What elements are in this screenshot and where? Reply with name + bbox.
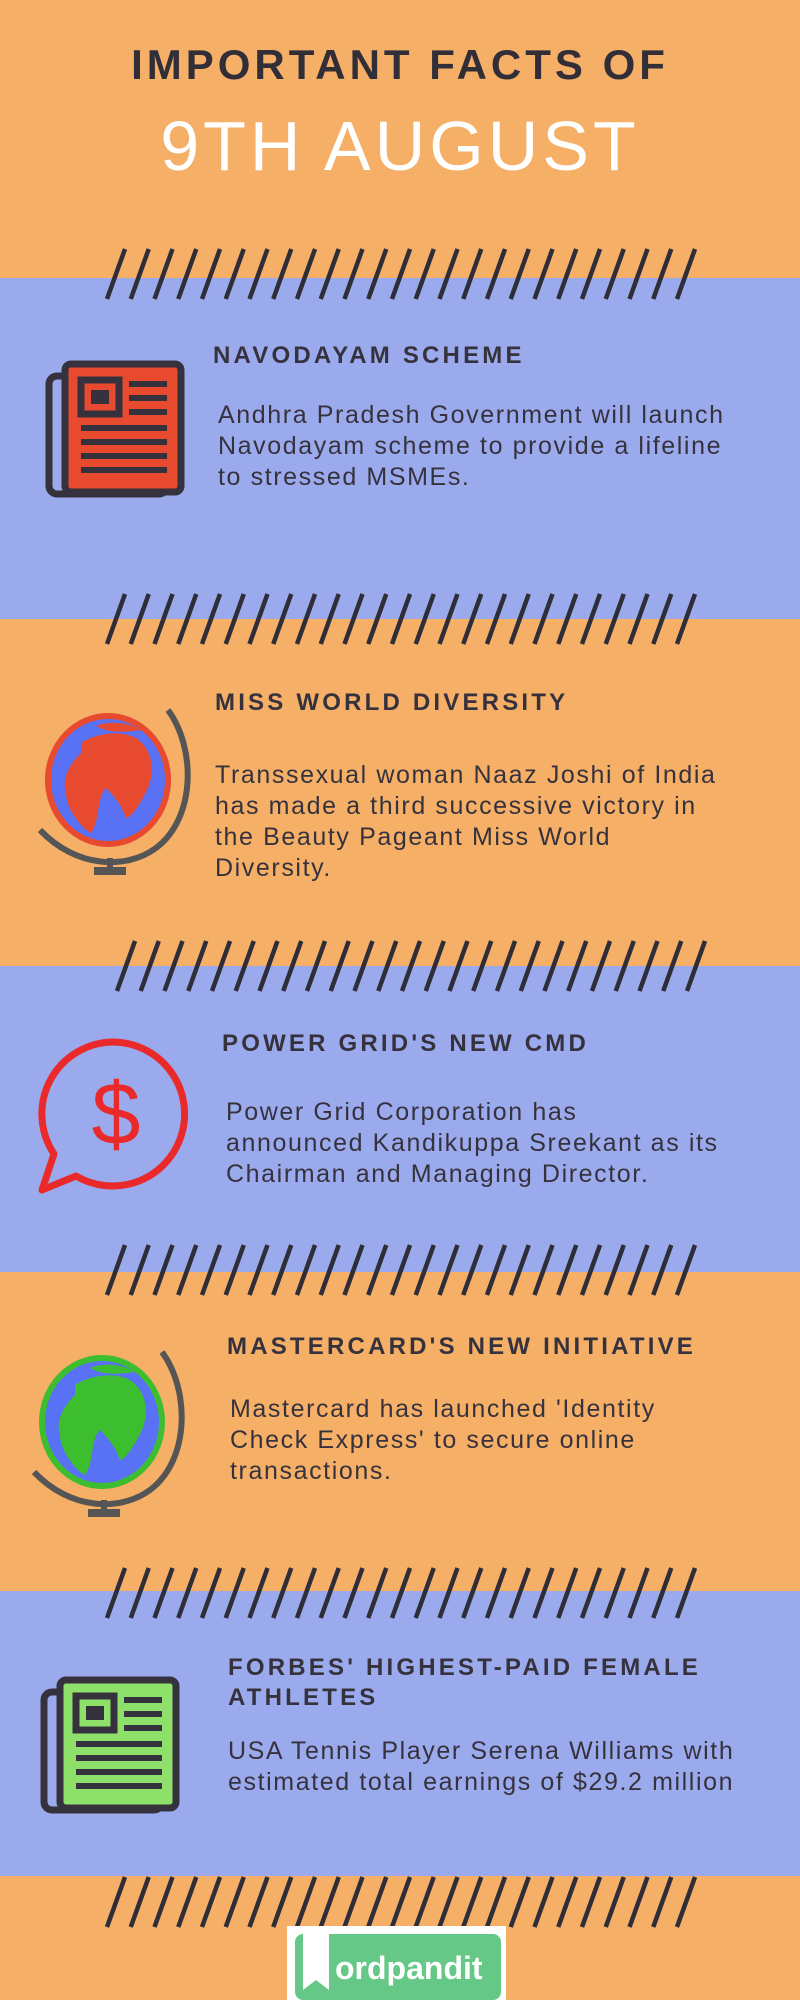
- slashes band 1: [104, 248, 698, 300]
- body text: Power Grid Corporation has: [226, 1098, 577, 1126]
- body text: Chairman and Managing Director.: [226, 1160, 649, 1188]
- icon: newspaper green: [40, 1676, 180, 1814]
- slashes band 6: [104, 1876, 698, 1928]
- body text: has made a third successive victory in: [215, 792, 697, 820]
- heading: MASTERCARD'S NEW INITIATIVE: [227, 1333, 696, 1360]
- heading: NAVODAYAM SCHEME: [213, 342, 525, 369]
- panel: Mastercard new initiative: [32, 1333, 696, 1517]
- logo: wordpandit: [287, 1926, 506, 2000]
- slashes band 3: [114, 940, 708, 992]
- icon: bookmark W: [303, 1934, 329, 1990]
- body text: [218, 401, 725, 491]
- panel: Miss World Diversity: [38, 689, 717, 882]
- icon: newspaper red: [46, 360, 184, 498]
- title line 2: date: 9TH AUGUST: [160, 107, 640, 185]
- panel: Navodayam scheme: [46, 342, 725, 498]
- heading: [228, 1654, 701, 1711]
- body text: Transsexual woman Naaz Joshi of India: [215, 761, 717, 789]
- slashes band 2: [104, 593, 698, 645]
- body text: transactions.: [230, 1457, 393, 1485]
- body text: Check Express' to secure online: [230, 1426, 636, 1454]
- body text: to stressed MSMEs.: [218, 463, 470, 491]
- body text: [215, 761, 717, 882]
- heading: POWER GRID'S NEW CMD: [222, 1030, 589, 1057]
- slashes band 4: [104, 1244, 698, 1296]
- heading: MISS WORLD DIVERSITY: [215, 689, 568, 716]
- body text: estimated total earnings of $29.2 million: [228, 1768, 734, 1796]
- icon: globe green: [32, 1350, 185, 1517]
- heading: ATHLETES: [228, 1684, 378, 1711]
- logo: wordpandit: ordpandit: [335, 1950, 483, 1986]
- body text: Mastercard has launched 'Identity: [230, 1395, 656, 1423]
- body text: Diversity.: [215, 854, 332, 882]
- title: [131, 41, 669, 185]
- body text: Andhra Pradesh Government will launch: [218, 401, 725, 429]
- panel: Forbes highest-paid female athletes: [40, 1654, 734, 1814]
- slashes band 5: [104, 1567, 698, 1619]
- body text: [230, 1395, 656, 1485]
- body text: the Beauty Pageant Miss World: [215, 823, 611, 851]
- icon: dollar speech bubble: [38, 1038, 188, 1194]
- body text: Navodayam scheme to provide a lifeline: [218, 432, 722, 460]
- body text: [226, 1098, 719, 1188]
- body text: USA Tennis Player Serena Williams with: [228, 1737, 734, 1765]
- body text: [228, 1737, 734, 1796]
- icon: dollar speech bubble: $: [92, 1064, 140, 1163]
- heading: FORBES' HIGHEST-PAID FEMALE: [228, 1654, 701, 1681]
- title line 1: IMPORTANT FACTS OF: [131, 41, 669, 88]
- body text: announced Kandikuppa Sreekant as its: [226, 1129, 719, 1157]
- icon: globe red: [38, 708, 191, 875]
- panel: Power Grid new CMD: [38, 1030, 719, 1194]
